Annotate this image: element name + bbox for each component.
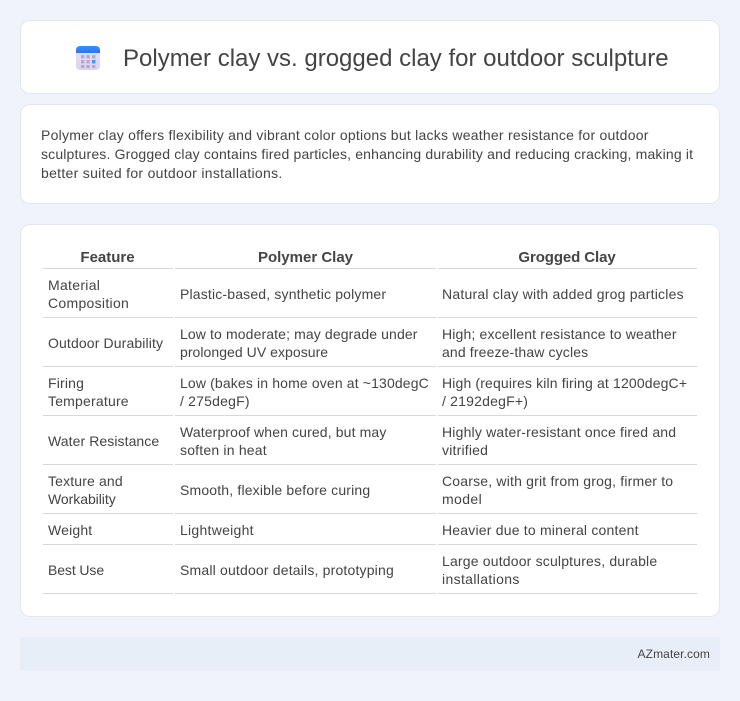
- icon: calendar: [76, 46, 100, 70]
- row: Texture and Workability: Workability: [48, 491, 116, 507]
- row: Outdoor Durability: and freeze-thaw cycles: [442, 344, 588, 360]
- row: Water Resistance: [48, 424, 676, 458]
- row: Material Composition: Composition: [48, 295, 129, 311]
- row: Weight: Weight: [48, 522, 92, 538]
- row: Firing Temperature: [48, 375, 687, 409]
- row: Texture and Workability: Smooth, flexible before curing: [180, 482, 370, 498]
- row: Texture and Workability: model: [442, 491, 482, 507]
- row: Outdoor Durability: [48, 326, 677, 360]
- footer source text: AZmater.com: [638, 647, 710, 661]
- row: Best Use: installations: [442, 571, 520, 587]
- row: Texture and Workability: Coarse, with grit from grog, firmer to: [442, 473, 673, 489]
- text block: summary: Polymer clay offers flexibility and vibrant color options but lacks weather resistance for outdoor: [41, 127, 649, 143]
- row: Weight: [48, 522, 639, 538]
- row: Best Use: [48, 553, 657, 587]
- row: Outdoor Durability: prolonged UV exposure: [180, 344, 328, 360]
- row: Firing Temperature: High (requires kiln firing at 1200degC+: [442, 375, 687, 391]
- column header: Grogged Clay: Grogged Clay: [518, 249, 616, 266]
- row: Firing Temperature: Firing: [48, 375, 84, 391]
- row: Water Resistance: Water Resistance: [48, 433, 159, 449]
- row: Firing Temperature: / 2192degF+): [442, 393, 528, 409]
- row: Best Use: Small outdoor details, prototyping: [180, 562, 394, 578]
- row: Texture and Workability: Texture and: [48, 473, 123, 489]
- row: Outdoor Durability: High; excellent resistance to weather: [442, 326, 677, 342]
- column header: Feature: Feature: [80, 249, 135, 266]
- row: Weight: Heavier due to mineral content: [442, 522, 639, 538]
- row: Firing Temperature: / 275degF): [180, 393, 250, 409]
- row: Material Composition: [48, 277, 684, 311]
- panel: comparison table card: [20, 224, 720, 617]
- text block: summary: sculptures. Grogged clay contains fired particles, enhancing durability and reducing cracking, making it: [41, 146, 693, 162]
- column header: Polymer Clay: Polymer Clay: [258, 249, 353, 266]
- row: Best Use: Best Use: [48, 562, 104, 578]
- row: Material Composition: Material: [48, 277, 100, 293]
- row: Firing Temperature: Low (bakes in home oven at ~130degC: [180, 375, 429, 391]
- title: Polymer clay vs. grogged clay for outdoor sculpture: [123, 45, 669, 72]
- row: Water Resistance: Highly water-resistant once fired and: [442, 424, 676, 440]
- row: Material Composition: Natural clay with added grog particles: [442, 286, 684, 302]
- row: Outdoor Durability: Low to moderate; may degrade under: [180, 326, 418, 342]
- row: Water Resistance: soften in heat: [180, 442, 267, 458]
- panel: summary card: [20, 104, 720, 204]
- footer bar: [20, 637, 720, 671]
- row: Outdoor Durability: Outdoor Durability: [48, 335, 163, 351]
- row: Best Use: Large outdoor sculptures, durable: [442, 553, 657, 569]
- row: Water Resistance: vitrified: [442, 442, 488, 458]
- row: Water Resistance: Waterproof when cured, but may: [180, 424, 386, 440]
- text block: summary: better suited for outdoor installations.: [41, 165, 283, 181]
- row: Firing Temperature: Temperature: [48, 393, 129, 409]
- panel: title card: [20, 20, 720, 94]
- row: Material Composition: Plastic-based, synthetic polymer: [180, 286, 386, 302]
- row: Weight: Lightweight: [180, 522, 254, 538]
- text block: summary: [41, 127, 693, 181]
- row: Texture and Workability: [48, 473, 673, 507]
